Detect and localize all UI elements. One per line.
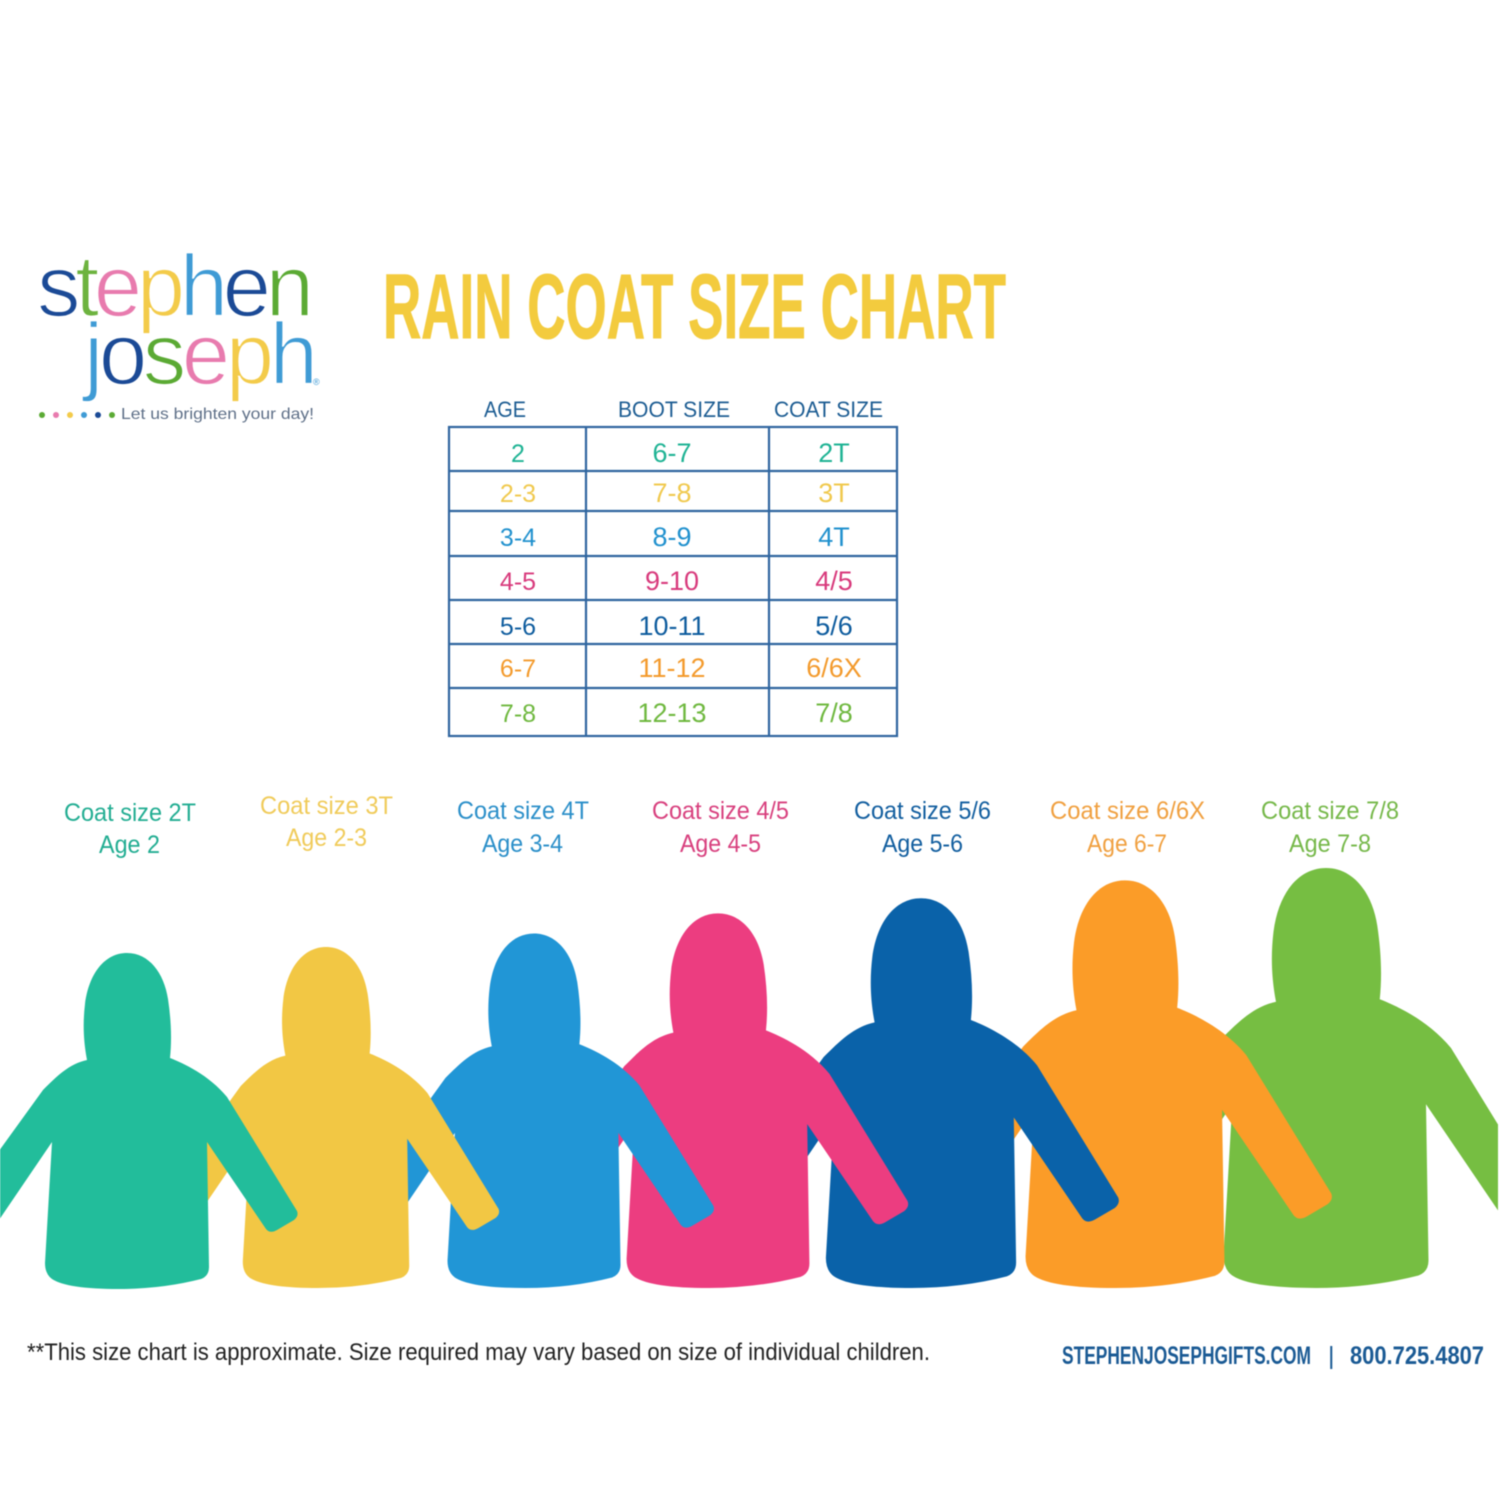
- table row: age 2-3: 7-8: [652, 478, 692, 508]
- label: coat size 4T: [457, 797, 589, 858]
- table row: age 2-3: 2-3: [500, 480, 536, 508]
- table column headers: COAT SIZE: [774, 397, 883, 422]
- table row: age 2-3: 3T: [818, 478, 850, 508]
- label: coat size 5/6: [854, 797, 991, 858]
- size table: [449, 397, 897, 736]
- table row: age 2: 6-7: [652, 438, 692, 468]
- coat: teal 2T: [0, 953, 298, 1289]
- table row: age 2: 2: [511, 440, 525, 468]
- table row: age 2-3: [500, 478, 850, 508]
- table row: age 4-5: 9-10: [645, 566, 699, 596]
- table row: age 6-7: [500, 653, 862, 683]
- table column headers: AGE: [484, 397, 526, 422]
- label: coat size 5/6: Coat size 5/6: [854, 797, 991, 825]
- table row: age 4-5: [500, 566, 853, 596]
- label: coat size 4T: Age 3-4: [482, 830, 563, 858]
- table row: age 3-4: 8-9: [652, 522, 692, 552]
- label: coat size 2T: Age 2: [99, 831, 160, 859]
- table row: age 6-7: 11-12: [638, 653, 706, 683]
- contact details: |: [1328, 1342, 1334, 1370]
- table row: age 7-8: 7-8: [500, 700, 536, 728]
- label: coat size 7/8: Age 7-8: [1289, 830, 1371, 858]
- coat: pink 4/5: [525, 913, 908, 1288]
- logo: stephen joseph: [37, 238, 320, 423]
- table row: age 6-7: 6-7: [500, 655, 536, 683]
- table row: age 5-6: 5/6: [815, 611, 853, 641]
- label: coat size 3T: Coat size 3T: [260, 792, 393, 820]
- label: coat size 2T: Coat size 2T: [64, 799, 196, 827]
- table row: age 6-7: 6/6X: [806, 653, 862, 683]
- coat: blue 4T: [352, 934, 714, 1288]
- label: coat size 3T: Age 2-3: [286, 824, 367, 852]
- registered mark: ®: [313, 377, 320, 387]
- label: coat size 7/8: Coat size 7/8: [1261, 797, 1399, 825]
- label: coat size 6/6X: [1050, 797, 1205, 858]
- label: coat size 2T: [64, 799, 196, 859]
- row of coat silhouettes: [0, 868, 1500, 1289]
- logo word: stephen: stephen: [37, 238, 314, 335]
- table row: age 4-5: 4/5: [815, 566, 853, 596]
- title: RAIN COAT SIZE CHART: [383, 256, 1006, 358]
- table grid: [449, 427, 897, 736]
- right page margin: [1498, 1050, 1500, 1250]
- table row: age 5-6: 5-6: [500, 613, 536, 641]
- coat: orange 6/6X: [916, 880, 1332, 1288]
- label: coat size 5/6: Age 5-6: [882, 830, 963, 858]
- coat: dark blue 5/6: [721, 898, 1119, 1288]
- table row: age 2: 2T: [818, 438, 850, 468]
- table column headers: BOOT SIZE: [618, 397, 730, 422]
- contact details: STEPHENJOSEPHGIFTS.COM: [1062, 1342, 1311, 1370]
- table row: age 5-6: [500, 611, 853, 641]
- table row: age 7-8: 12-13: [637, 698, 707, 728]
- label: coat size 4/5: Coat size 4/5: [652, 797, 789, 825]
- label: coat size 7/8: [1261, 797, 1399, 858]
- table row: age 5-6: 10-11: [638, 611, 706, 641]
- logo tagline: Let us brighten your day!: [121, 406, 314, 423]
- label: coat size 4/5: Age 4-5: [680, 830, 761, 858]
- table row: age 2: [511, 438, 850, 468]
- footnote: **This size chart is approximate. Size required may vary based on size of individual children.: [27, 1339, 930, 1366]
- table column headers: [484, 397, 883, 422]
- logo word: joseph: joseph: [81, 306, 318, 403]
- table row: age 4-5: 4-5: [500, 568, 536, 596]
- table row: age 3-4: [500, 522, 850, 552]
- label: coat size 4/5: [652, 797, 789, 858]
- table row: age 7-8: 7/8: [815, 698, 853, 728]
- label: coat size 3T: [260, 792, 393, 852]
- coat labels: [64, 792, 1399, 859]
- label: coat size 6/6X: Coat size 6/6X: [1050, 797, 1205, 825]
- contact details: 800.725.4807: [1350, 1342, 1484, 1370]
- logo dots: [39, 412, 115, 418]
- label: coat size 4T: Coat size 4T: [457, 797, 589, 825]
- table row: age 3-4: 4T: [818, 522, 850, 552]
- table row: age 3-4: 3-4: [500, 524, 536, 552]
- label: coat size 6/6X: Age 6-7: [1087, 830, 1167, 858]
- table row: age 7-8: [500, 698, 853, 728]
- coat: yellow 3T: [151, 947, 499, 1288]
- coat: green 7/8: [1110, 868, 1500, 1288]
